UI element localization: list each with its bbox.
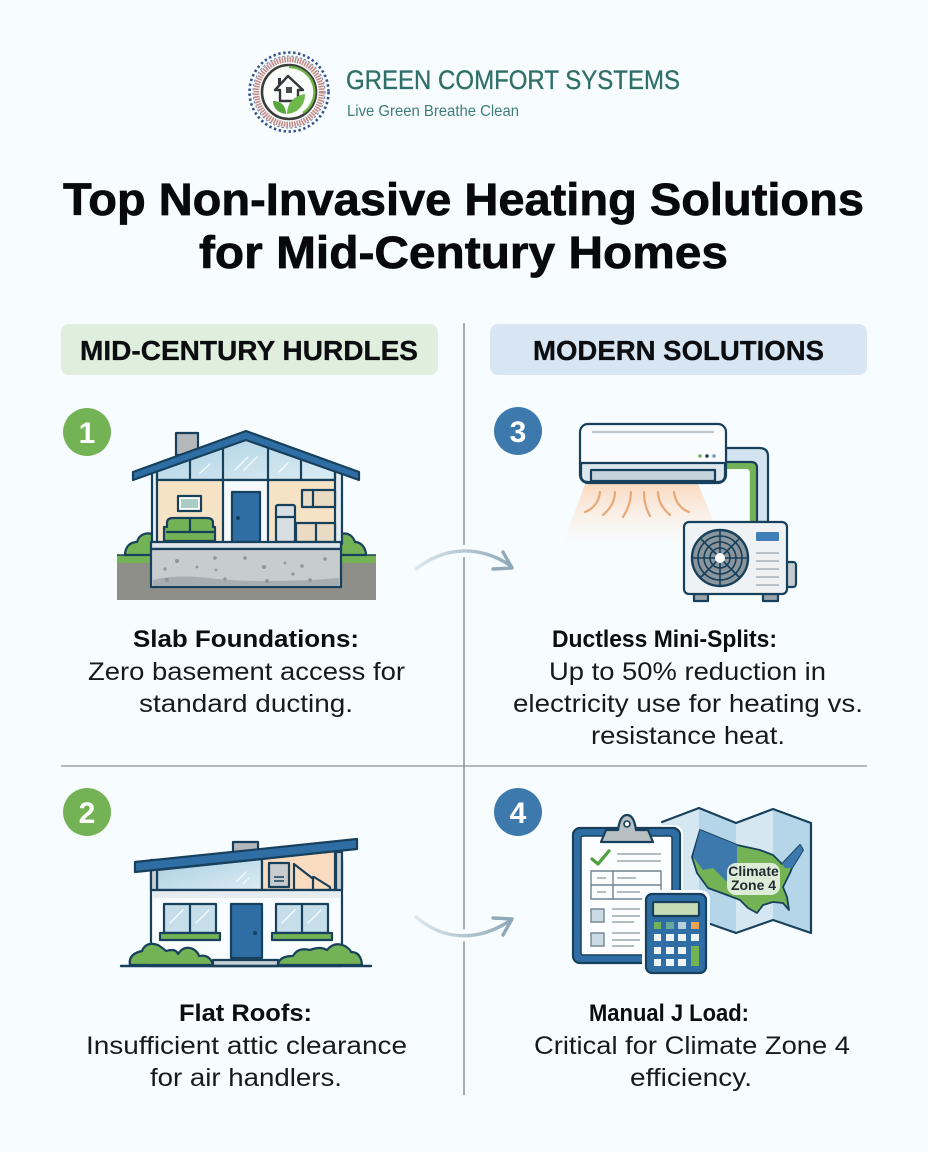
text: slab foundations: Slab Foundations: bbox=[133, 626, 359, 653]
title bbox=[63, 174, 864, 278]
text: slab foundations bbox=[88, 626, 405, 718]
logo: Green Comfort Systems bbox=[250, 52, 680, 132]
text: flat roofs: Insufficient attic clearance bbox=[86, 1032, 407, 1060]
text: ductless mini-splits: electricity use for heating vs. bbox=[513, 690, 863, 718]
text: flat roofs: for air handlers. bbox=[150, 1064, 342, 1092]
text: ductless mini-splits bbox=[513, 626, 863, 750]
icon: house on slab foundation bbox=[117, 431, 376, 600]
icon: ductless mini-split bbox=[563, 424, 796, 601]
icon: clipboard, calculator and climate map bbox=[570, 808, 811, 977]
tagline: Live Green Breathe Clean bbox=[347, 103, 519, 120]
brand name: GREEN COMFORT SYSTEMS bbox=[346, 65, 680, 95]
column heading: Modern Solutions: MODERN SOLUTIONS bbox=[533, 335, 824, 366]
climate zone label bbox=[727, 863, 780, 895]
column heading: Mid-Century Hurdles bbox=[61, 324, 438, 375]
text: manual J load: Critical for Climate Zone 4 bbox=[534, 1032, 850, 1060]
warm air flow bbox=[563, 484, 714, 545]
badge 4: 4 bbox=[510, 797, 527, 830]
badge 1: 1 bbox=[79, 417, 95, 450]
text: ductless mini-splits: Up to 50% reduction in bbox=[549, 658, 826, 686]
title: Top Non-Invasive Heating Solutions bbox=[63, 174, 864, 225]
text: slab foundations: Zero basement access for bbox=[88, 658, 405, 686]
badge 2: 2 bbox=[79, 797, 95, 830]
icon: flat-roof house bbox=[121, 839, 371, 966]
arrow: slab foundations to mini-splits bbox=[416, 551, 512, 569]
badge 3: 3 bbox=[510, 416, 526, 449]
badge 4 bbox=[494, 788, 542, 836]
panel: manual J load bbox=[494, 788, 850, 1092]
title: for Mid-Century Homes bbox=[199, 227, 728, 278]
column heading: Mid-Century Hurdles: MID-CENTURY HURDLES bbox=[80, 335, 418, 366]
text: manual J load: Manual J Load: bbox=[589, 1000, 749, 1027]
text: flat roofs: Flat Roofs: bbox=[179, 1000, 312, 1027]
badge 3 bbox=[494, 407, 542, 455]
badge 1 bbox=[63, 408, 111, 456]
column heading: Modern Solutions bbox=[490, 324, 867, 375]
panel: slab foundations bbox=[63, 408, 405, 718]
text: ductless mini-splits: Ductless Mini-Splits: bbox=[552, 626, 777, 653]
text: ductless mini-splits: resistance heat. bbox=[591, 722, 785, 750]
calculator bbox=[642, 890, 710, 977]
panel: ductless mini-splits bbox=[494, 407, 863, 750]
text: slab foundations: standard ducting. bbox=[139, 690, 353, 718]
text: manual J load: efficiency. bbox=[630, 1064, 752, 1092]
panel: flat roofs bbox=[63, 788, 407, 1092]
arrow: flat roofs to manual J load bbox=[416, 917, 512, 936]
text: manual J load bbox=[534, 1000, 850, 1092]
logo badge bbox=[250, 52, 328, 132]
climate zone label: Climate bbox=[728, 863, 779, 879]
climate zone label: Zone 4 bbox=[731, 877, 776, 893]
clipboard bbox=[570, 815, 683, 966]
badge 2 bbox=[63, 788, 111, 836]
text: flat roofs bbox=[86, 1000, 407, 1092]
map bbox=[662, 808, 811, 933]
